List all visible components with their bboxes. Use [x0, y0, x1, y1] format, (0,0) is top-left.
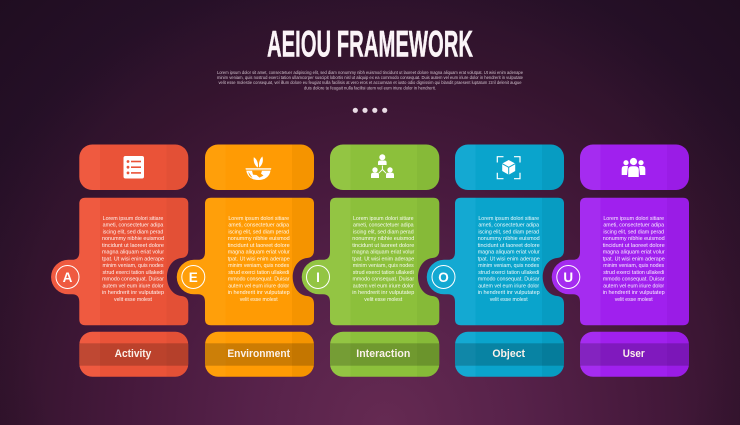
body text: Interaction: nonummy nibhie euismod: [352, 236, 414, 242]
badge: I: [306, 266, 330, 288]
body text: Activity: tpat. Ut wisi enim aderape: [102, 256, 164, 262]
body text: Environment: minim veniam, quis nodes: [228, 263, 289, 269]
body panel with A tab: [51, 198, 188, 325]
label panel: Environment: [205, 332, 314, 377]
intro paragraph: [217, 70, 523, 90]
body text: Interaction: [352, 216, 414, 303]
icon panel: Interaction: [330, 144, 439, 190]
body text: Interaction: autem vel eum iriure dolor: [353, 284, 414, 290]
body text: Object: minim veniam, quis nodes: [478, 263, 539, 269]
badge: O: [432, 266, 455, 288]
icon panel: Object: [455, 144, 564, 190]
body text: Interaction: iscing elit, sed diam perad: [353, 229, 414, 235]
icon panel: User: [580, 144, 689, 190]
title: AEIOU FRAMEWORK: [267, 24, 473, 65]
column: Activity: [51, 144, 188, 377]
intro paragraph: Lorem ipsum dolor sit amet, consectetuer adipiscing elit, sed diam nonummy nibh euismod tincidunt ut laoreet dolore magna aliquam erat volutpat. Ut wisi enim adenape: [217, 70, 523, 75]
body text: Object: mmodo consequat. Duisar: [478, 277, 540, 283]
body text: Activity: Lorem ipsum dolori sitiare: [103, 216, 163, 222]
badge: U: [557, 266, 580, 288]
body text: Object: nonummy nibhie euismod: [478, 236, 540, 242]
label panel: User: User: [623, 348, 645, 360]
body text: Object: strud exerci tation ullakedi: [478, 270, 539, 276]
body text: Environment: iscing elit, sed diam perad: [228, 229, 289, 235]
body text: Activity: minim veniam, quis nodes: [102, 263, 164, 269]
badge: A: [56, 266, 79, 288]
body text: User: nonummy nibhie euismod: [603, 236, 665, 242]
body text: Object: magna aliquam eriat volur: [478, 250, 540, 256]
body text: Activity: ameti, consectetuer adipa: [103, 223, 164, 229]
body text: Interaction: velit esse molest: [364, 297, 403, 303]
body text: User: tpat. Ut wisi enim aderape: [603, 256, 665, 262]
body text: Interaction: strud exerci tation ullakedi: [353, 270, 414, 276]
body text: Object: in hendrerit inr vulputatep: [478, 290, 540, 296]
badge: E: E: [189, 270, 198, 285]
body panel with E tab: [177, 198, 314, 325]
body panel with I tab: [302, 198, 439, 325]
body text: Object: iscing elit, sed diam perad: [478, 229, 539, 235]
body text: Environment: nonummy nibhie euismod: [228, 236, 290, 242]
body text: Interaction: ameti, consectetuer adipa: [353, 223, 414, 229]
label panel: Interaction: Interaction: [356, 348, 410, 360]
body text: User: magna aliquam eriat volur: [603, 250, 665, 256]
badge: O: O: [438, 270, 449, 285]
body text: Activity: iscing elit, sed diam perad: [103, 229, 163, 235]
body text: Interaction: tpat. Ut wisi enim aderape: [352, 256, 414, 262]
badge: I: I: [316, 270, 320, 285]
label panel: Environment: Environment: [227, 348, 290, 360]
body text: User: tincidunt ut laoreet dolore: [603, 243, 665, 249]
body text: User: iscing elit, sed diam perad: [603, 229, 664, 235]
body text: Interaction: minim veniam, quis nodes: [353, 263, 414, 269]
body text: User: [603, 216, 665, 303]
body text: Environment: ameti, consectetuer adipa: [228, 223, 290, 229]
body text: Environment: in hendrerit inr vulputatep: [228, 290, 290, 296]
body text: User: ameti, consectetuer adipa: [603, 223, 665, 229]
body text: Environment: [228, 216, 290, 303]
label panel: Activity: Activity: [115, 348, 151, 360]
body text: Object: tincidunt ut laoreet dolore: [478, 243, 540, 249]
body text: Activity: velit esse molest: [114, 297, 152, 303]
column: User: [552, 144, 689, 377]
body text: Interaction: Lorem ipsum dolori sitiare: [353, 216, 414, 222]
body text: Environment: mmodo consequat. Duisar: [228, 277, 290, 283]
icon: cube in frame: [497, 157, 520, 179]
column: Object: [427, 144, 564, 377]
body text: User: mmodo consequat. Duisar: [603, 277, 665, 283]
body text: Interaction: in hendrerit inr vulputatep: [352, 290, 414, 296]
body panel with O tab: [427, 198, 564, 325]
column: Interaction: [302, 144, 439, 377]
badge: U: U: [563, 270, 573, 285]
body text: Activity: mmodo consequat. Duisar: [102, 277, 164, 283]
body panel with U tab: [552, 198, 689, 325]
body text: User: in hendrerit inr vulputatep: [603, 290, 665, 296]
body text: Object: autem vel eum iriure dolor: [478, 284, 539, 290]
badge: A: A: [63, 270, 73, 285]
icon: checklist: [124, 156, 144, 178]
body text: Activity: autem vel eum iriure dolor: [102, 284, 164, 290]
body text: Activity: in hendrerit inr vulputatep: [102, 290, 164, 296]
column: Environment: [177, 144, 314, 377]
label panel: Activity: [79, 332, 188, 377]
icon: plant in bowl: [246, 156, 271, 180]
body text: User: Lorem ipsum dolori sitiare: [603, 216, 664, 222]
intro paragraph: duis dolore te feugait nulla facilisi utem vel eum iriure dolor in hendrerit.: [304, 86, 436, 90]
body text: Activity: strud exerci tation ullakedi: [102, 270, 164, 276]
body text: Object: Lorem ipsum dolori sitiare: [478, 216, 539, 222]
icon: connected people: [371, 154, 394, 178]
body text: Activity: [102, 216, 164, 303]
label panel: Interaction: [330, 332, 439, 377]
body text: User: autem vel eum iriure dolor: [603, 284, 664, 290]
body text: User: strud exerci tation ullakedi: [603, 270, 664, 276]
body text: Environment: tpat. Ut wisi enim aderape: [228, 256, 290, 262]
body text: Interaction: magna aliquam eriat volur: [352, 250, 414, 256]
icon panel: Activity: [79, 144, 188, 190]
body text: Object: tpat. Ut wisi enim aderape: [478, 256, 540, 262]
body text: Environment: magna aliquam eriat volur: [228, 250, 290, 256]
body text: Activity: nonummy nibhie euismod: [102, 236, 164, 242]
label panel: User: [580, 332, 689, 377]
intro paragraph: velit esse molestie consequat, vel illum dolore eu feugiat nulla facilisis at vero eros et accumsan et iusto odio dignissim qui blandit praesent luptatum zzril delenit augue: [218, 80, 522, 85]
body text: Environment: velit esse molest: [240, 297, 278, 303]
body text: Environment: Lorem ipsum dolori sitiare: [228, 216, 289, 222]
body text: Environment: strud exerci tation ullakedi: [228, 270, 289, 276]
body text: Interaction: mmodo consequat. Duisar: [352, 277, 414, 283]
label panel: Object: Object: [492, 348, 525, 360]
body text: Object: [478, 216, 540, 303]
label panel: Object: [455, 332, 564, 377]
body text: Object: ameti, consectetuer adipa: [478, 223, 540, 229]
pagination dots: [353, 108, 387, 113]
body text: User: velit esse molest: [615, 297, 653, 303]
body text: Environment: autem vel eum iriure dolor: [228, 284, 289, 290]
body text: Activity: magna aliquam eriat volur: [102, 250, 164, 256]
body text: User: minim veniam, quis nodes: [603, 263, 664, 269]
body text: Object: velit esse molest: [490, 297, 528, 303]
icon panel: Environment: [205, 144, 314, 190]
badge: E: [182, 266, 205, 288]
intro paragraph: minim veniam, quis nostrud exerci tation ullamcorper suscipit lobortis nisl ut aliquip ex ea commodo consequat. Duis autem vel eum iriure dolor in hendrerit in vulputate: [217, 75, 523, 80]
body text: Environment: tincidunt ut laoreet dolore: [228, 243, 290, 249]
body text: Activity: tincidunt ut laoreet dolore: [102, 243, 164, 249]
body text: Interaction: tincidunt ut laoreet dolore: [352, 243, 414, 249]
icon: group of people: [622, 158, 645, 177]
